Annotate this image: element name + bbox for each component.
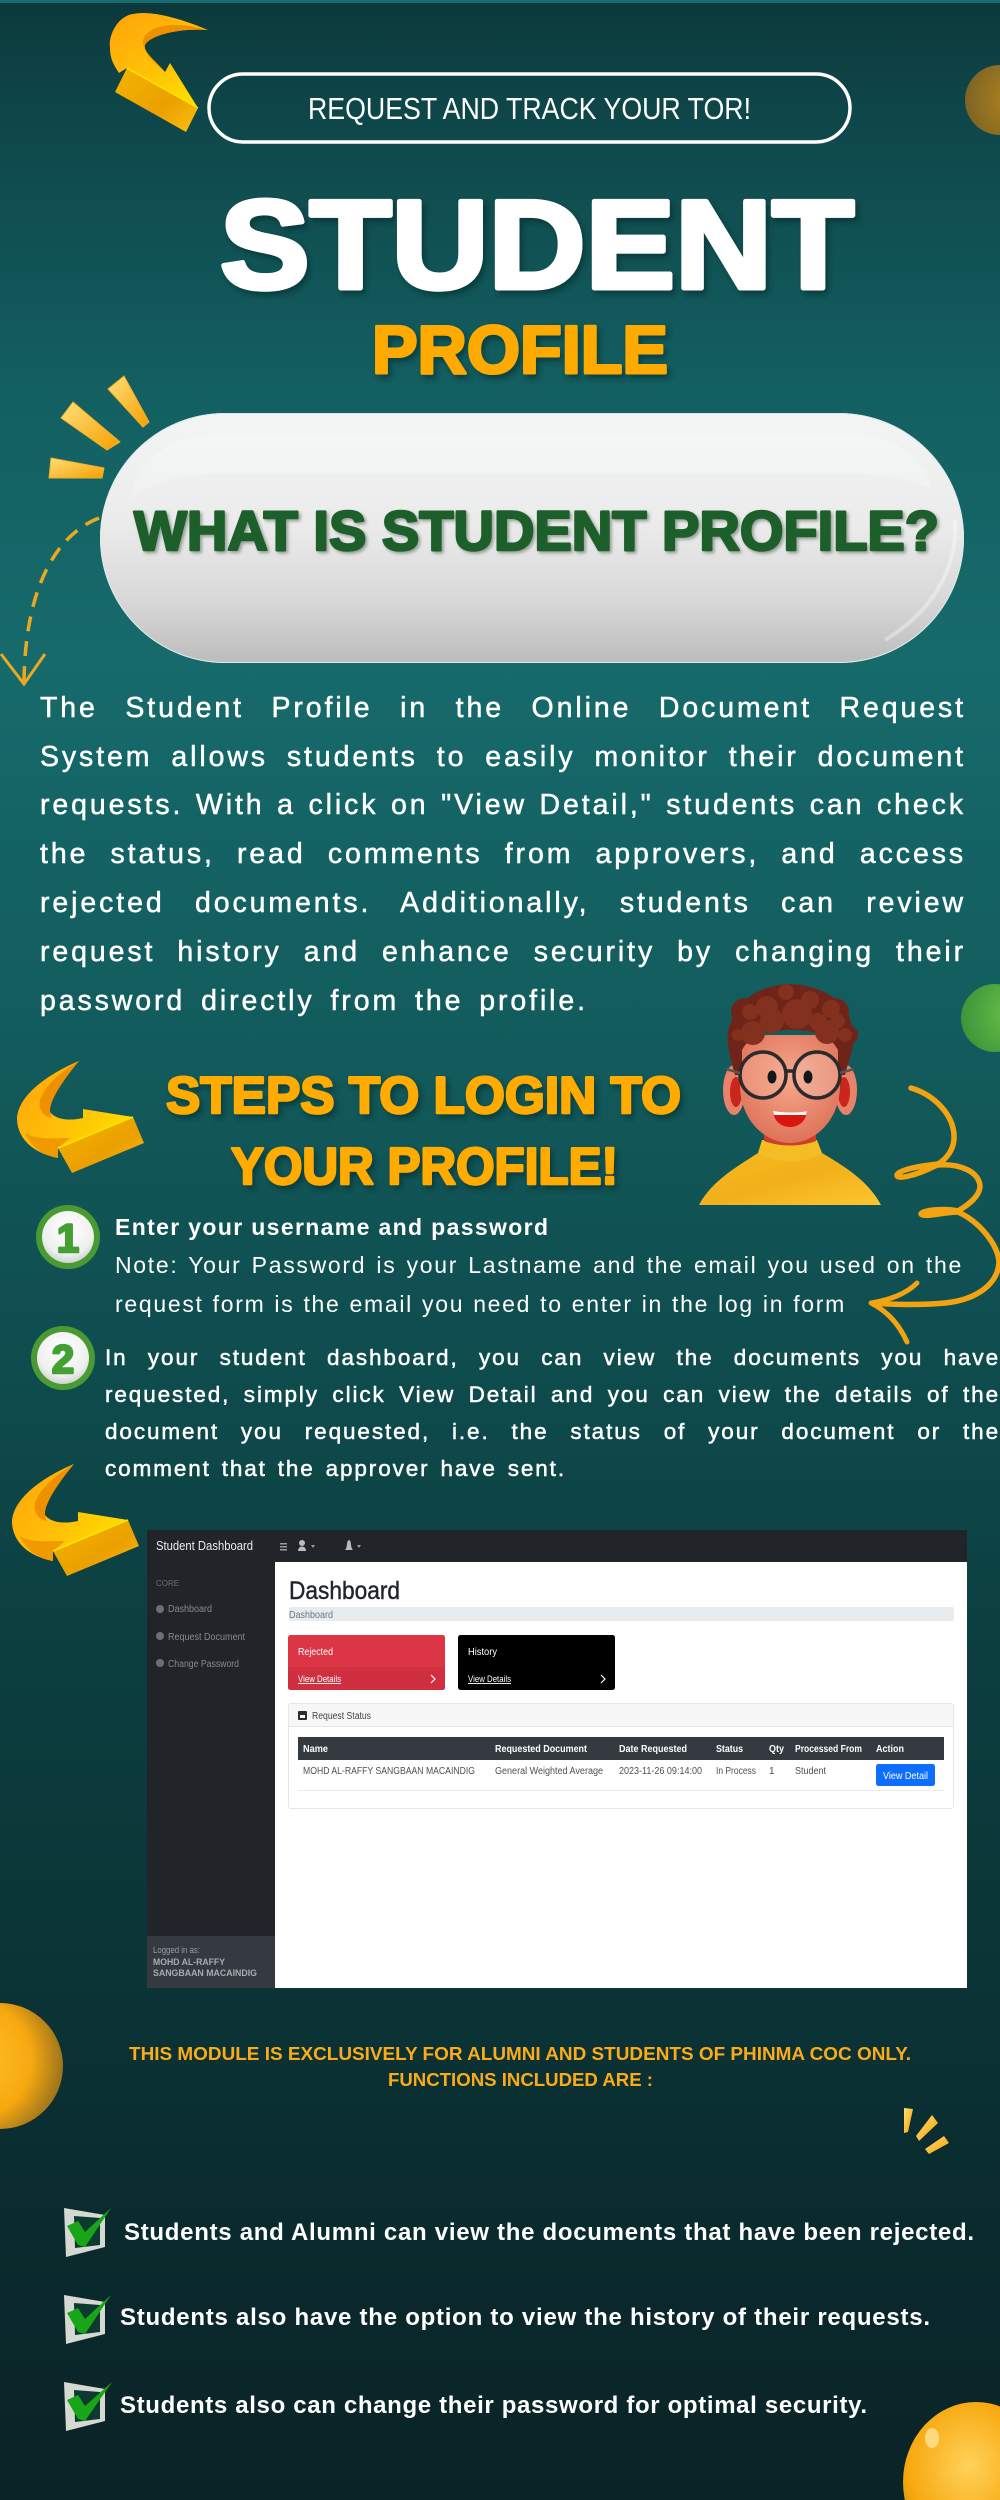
step 1 note: Note: Your Password is your Lastname and the email you used on the (115, 1252, 963, 1278)
face (740, 1035, 840, 1143)
card: history: View Details (468, 1674, 511, 1684)
heading: steps to login: STEPS TO LOGIN TO (166, 1067, 681, 1125)
icon: dashed curved arrow (1, 518, 99, 684)
description paragraph: password directly from the profile. (40, 985, 588, 1017)
icon: number 1 badge (36, 1205, 100, 1269)
card: request status table: Processed From (795, 1744, 862, 1755)
card: request status table: Qty (769, 1744, 784, 1755)
card: request status table: In Process (716, 1766, 756, 1777)
sidebar: CORE (156, 1579, 179, 1588)
card: request status table: Request Status (312, 1711, 371, 1722)
button: view detail: View Detail (883, 1770, 928, 1782)
card: history: History (468, 1647, 497, 1658)
notice text (129, 2044, 911, 2090)
icon: check box 1 (64, 2208, 111, 2257)
sidebar footer: MOHD AL-RAFFY (153, 1957, 226, 1968)
illustration: cartoon student with glasses (699, 984, 881, 1205)
card: history (458, 1635, 615, 1690)
notice text: THIS MODULE IS EXCLUSIVELY FOR ALUMNI AND STUDENTS OF PHINMA COC ONLY. (129, 2044, 911, 2064)
icon: check box 3 (64, 2382, 112, 2431)
checklist item 2 text: Students also have the option to view the history of their requests. (120, 2304, 930, 2331)
step 2 text: In your student dashboard, you can view the documents you have (105, 1345, 1000, 1370)
title: STUDENT: STUDENT (220, 174, 854, 315)
icon: sparkle rays (49, 376, 149, 478)
description paragraph (40, 692, 966, 1017)
step 2 text (105, 1345, 1000, 1481)
shirt (699, 1153, 881, 1205)
icon: dashboard gold arrow (12, 1464, 139, 1576)
panel: dashboard screenshot (147, 1530, 967, 1988)
top navigation bar: Student Dashboard (156, 1539, 253, 1553)
title: PROFILE: PROFILE (372, 312, 668, 388)
card: rejected: Rejected (298, 1647, 333, 1658)
mouth (773, 1111, 807, 1127)
checklist item 1 text: Students and Alumni can view the documents that have been rejected. (124, 2219, 974, 2246)
notice text: FUNCTIONS INCLUDED ARE : (388, 2070, 653, 2090)
heading: steps to login: YOUR PROFILE! (231, 1138, 618, 1196)
panel: white glossy pill (100, 413, 964, 663)
breadcrumb: Dashboard (289, 1609, 333, 1621)
card: request status table: 1 (769, 1766, 775, 1777)
sidebar: Request Document (168, 1632, 245, 1643)
card: rejected (288, 1635, 445, 1690)
description paragraph: The Student Profile in the Online Document Request (40, 692, 966, 724)
top accent strip (0, 0, 1000, 3)
ears (723, 1065, 745, 1115)
button: view detail (876, 1764, 935, 1786)
checklist item 3 text: Students also can change their password for optimal security. (120, 2392, 867, 2419)
description paragraph: request history and enhance security by changing their (40, 936, 966, 968)
icon: number 2 badge: 2 (52, 1338, 74, 1382)
card: request status table: General Weighted Average (495, 1766, 603, 1777)
eyes (768, 1070, 776, 1084)
card: request status table: Action (876, 1744, 904, 1755)
card: request status table: Date Requested (619, 1744, 687, 1755)
icon: top gold arrow (110, 13, 208, 132)
decorative ball: top right (965, 65, 1000, 135)
sidebar (147, 1562, 275, 1988)
sidebar: Change Password (168, 1659, 239, 1670)
banner text: REQUEST AND TRACK YOUR TOR! (308, 91, 751, 126)
card: request status table: Student (795, 1766, 826, 1777)
card: request status table: MOHD AL-RAFFY SANGBAAN MACAINDIG (303, 1766, 475, 1777)
step 1 note: request form is the email you need to enter in the log in form (115, 1291, 846, 1317)
icon: steps gold arrow (17, 1061, 144, 1173)
heading: steps to login (166, 1067, 681, 1196)
card: request status table: Requested Document (495, 1744, 588, 1755)
decorative ball: left gold (0, 2003, 63, 2129)
top navigation bar (147, 1530, 967, 1562)
text: step 1 heading: Enter your username and password (115, 1214, 548, 1240)
dashboard heading: Dashboard (289, 1577, 400, 1605)
sidebar footer: SANGBAAN MACAINDIG (153, 1968, 257, 1979)
glasses (726, 1052, 854, 1098)
description paragraph: rejected documents. Additionally, students can review (40, 887, 966, 919)
icon: curly hand-drawn arrow (871, 1088, 999, 1342)
step 1 note (115, 1252, 963, 1317)
sidebar footer: Logged in as: (153, 1945, 200, 1955)
card: request status table: 2023-11-26 09:14:00 (619, 1766, 702, 1777)
sidebar: Dashboard (168, 1604, 212, 1615)
decorative ball: green (961, 984, 1000, 1052)
step 2 text: comment that the approver have sent. (105, 1456, 566, 1481)
step 2 text: requested, simply click View Detail and you can view the details of the (105, 1382, 1000, 1407)
banner pill (209, 74, 850, 142)
breadcrumb (289, 1607, 954, 1621)
description paragraph: System allows students to easily monitor their document (40, 741, 966, 773)
description paragraph: requests. With a click on "View Detail," students can check (40, 789, 966, 821)
card: request status table: Status (716, 1744, 743, 1755)
icon: number 2 badge (31, 1326, 95, 1390)
icon: number 1 badge: 1 (57, 1217, 79, 1261)
icon: small sparkle rays (904, 2108, 949, 2154)
sidebar footer (147, 1936, 275, 1988)
card: rejected: View Details (298, 1674, 341, 1684)
pill heading: WHAT IS STUDENT PROFILE? (134, 499, 939, 562)
card: request status table (288, 1704, 954, 1808)
hair (728, 984, 858, 1075)
neck (764, 1130, 816, 1146)
icon: check box 2 (64, 2295, 111, 2344)
step 2 text: document you requested, i.e. the status of your document or the (105, 1419, 1000, 1444)
decorative ball: bottom right gold (903, 2402, 1000, 2500)
description paragraph: the status, read comments from approvers, and access (40, 838, 966, 870)
card: request status table: Name (303, 1744, 328, 1755)
